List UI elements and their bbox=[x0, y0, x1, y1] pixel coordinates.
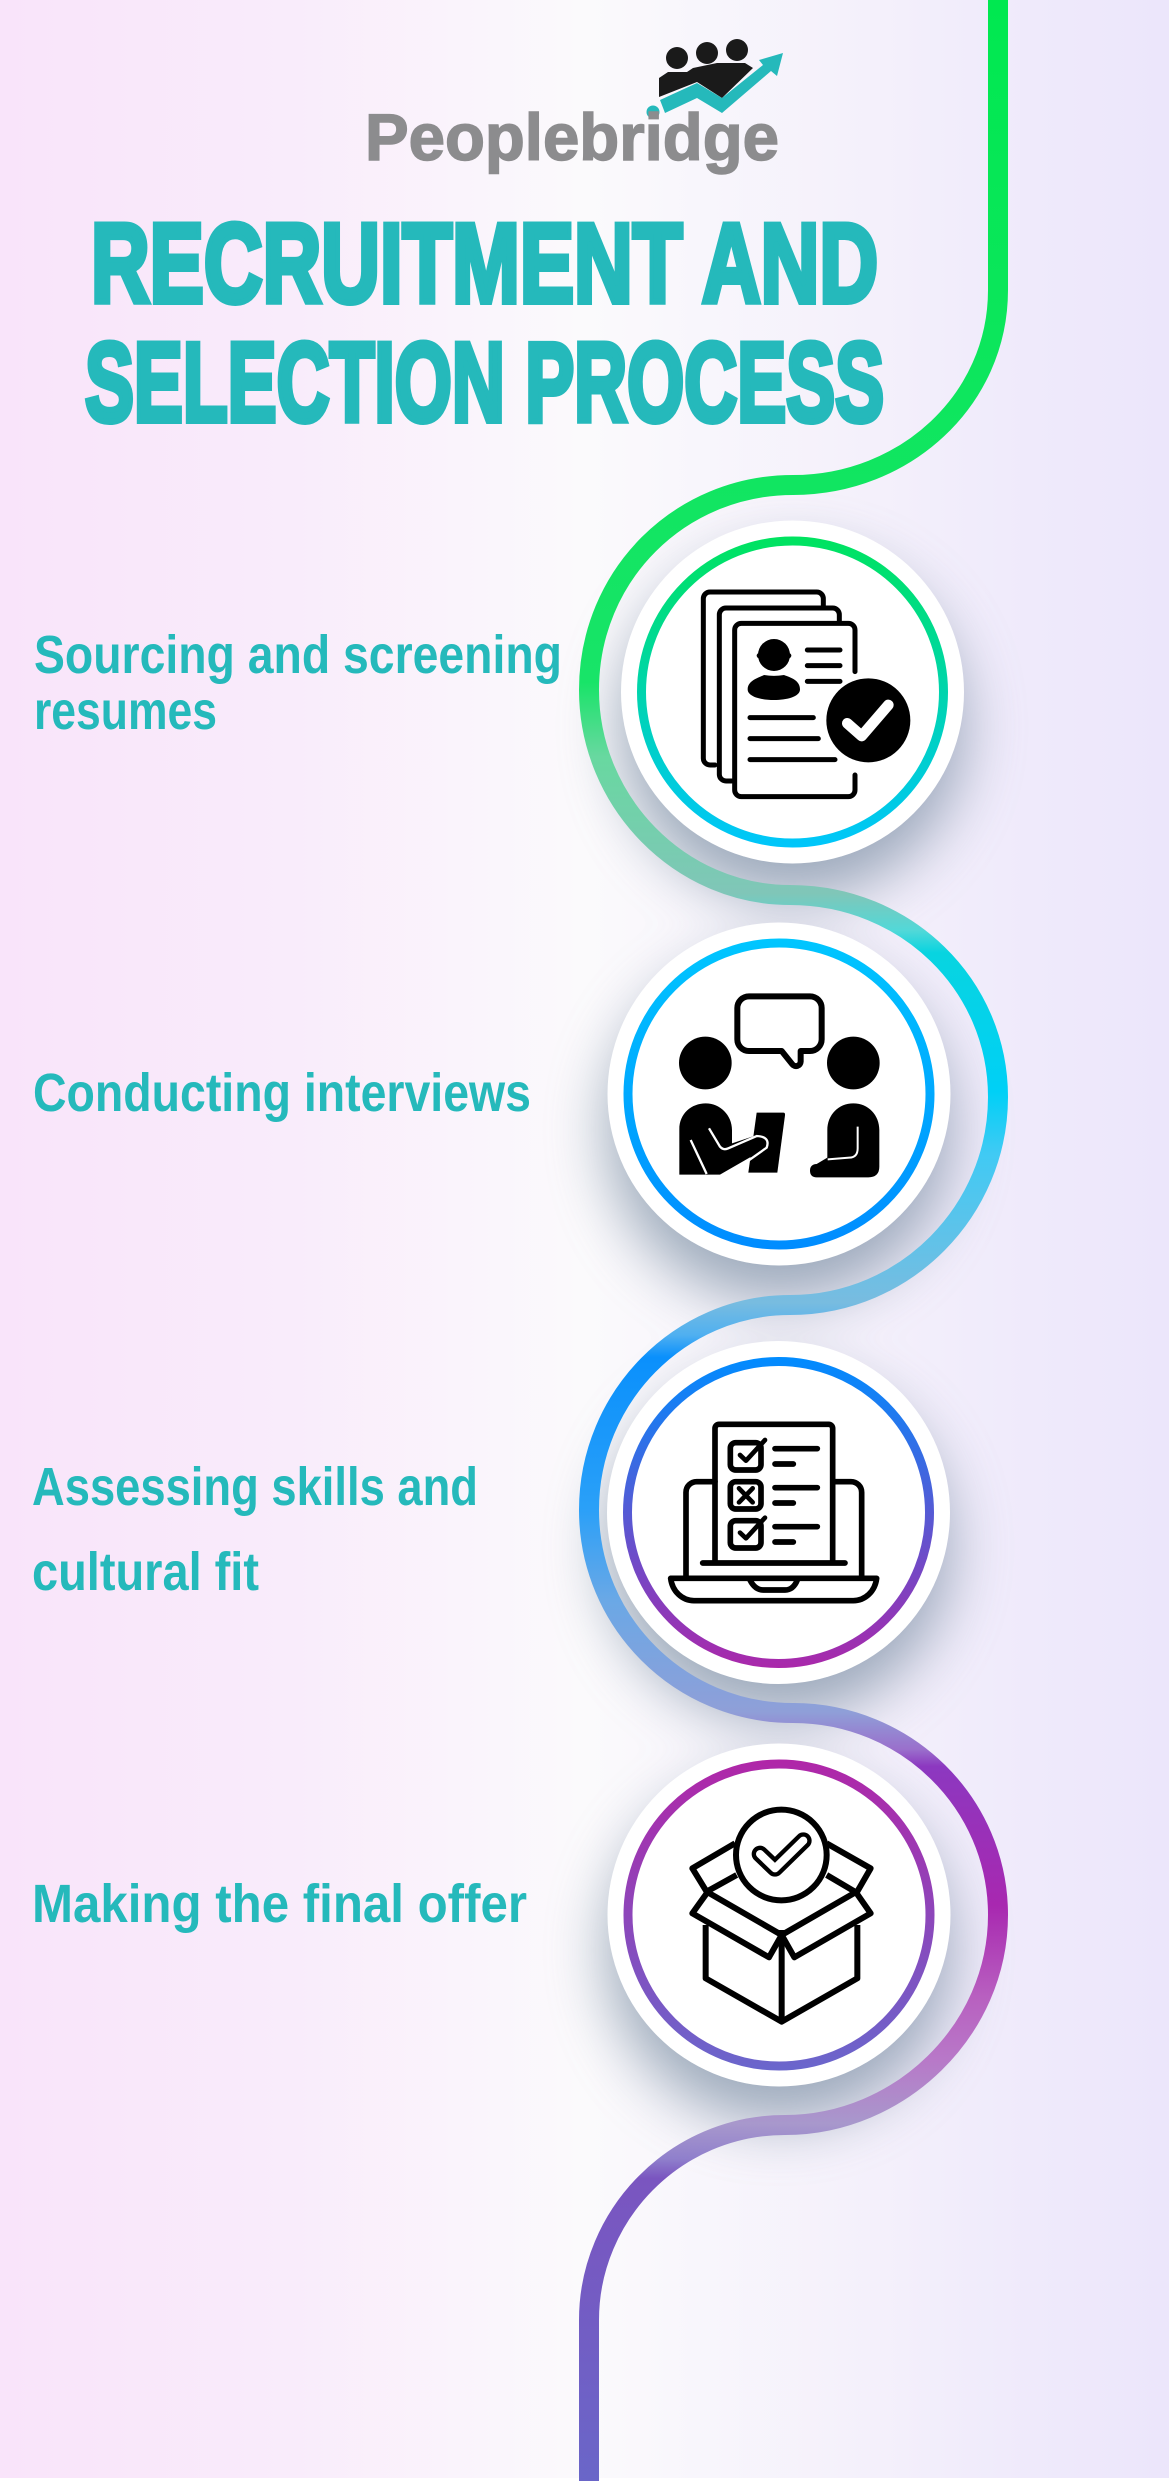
step 1 label: resumes bbox=[34, 681, 217, 741]
title bbox=[85, 201, 884, 445]
circle shadows bbox=[606, 555, 964, 2122]
logo icon: teal rising arrow bbox=[646, 53, 783, 118]
icon: resume stack with check bbox=[703, 592, 910, 797]
logo icon: people silhouettes bbox=[659, 39, 753, 98]
step 3 label bbox=[32, 1457, 478, 1602]
step 2 label: Conducting interviews bbox=[33, 1063, 531, 1123]
step 2 badge bbox=[608, 922, 950, 1266]
step 3 label: Assessing skills and bbox=[32, 1457, 478, 1517]
step 3 label: cultural fit bbox=[32, 1542, 259, 1602]
title line 1: RECRUITMENT AND bbox=[91, 201, 878, 326]
logo: Peoplebridge bbox=[365, 39, 783, 174]
step 4 label: Making the final offer bbox=[32, 1874, 527, 1934]
step 1 label: Sourcing and screening bbox=[34, 625, 562, 685]
icon: two people talking bbox=[679, 996, 880, 1177]
step 1 label bbox=[34, 625, 562, 741]
step 4 badge bbox=[608, 1744, 950, 2086]
step 1 badge bbox=[621, 520, 964, 864]
logo wordmark: Peoplebridge bbox=[365, 100, 779, 174]
icon: laptop with checklist bbox=[671, 1424, 877, 1601]
process track line bbox=[589, 0, 998, 2481]
step 3 badge bbox=[607, 1341, 950, 1684]
icon: open box with check bbox=[692, 1810, 871, 2022]
